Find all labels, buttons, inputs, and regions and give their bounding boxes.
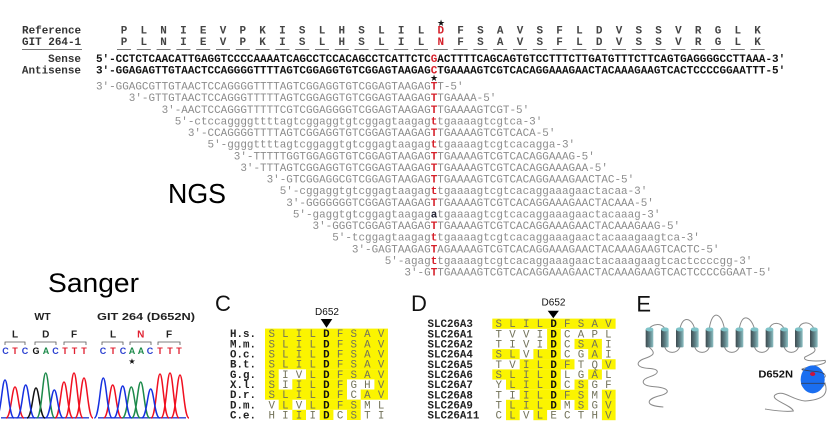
species labels: H.s.: [230, 329, 256, 341]
panel: NGS reads: 3'-AACTCCAGGGTTTTTCGTCGGAGGGGTCGGAGTAAGAG: [162, 105, 431, 117]
panel: NGS reads: 3'-GTTGTAACTCCAGGGTTTTTAGTCGGAGGTGTCGGAGTAAGAG: [129, 93, 431, 105]
row labels: Reference and GIT 264-1: Reference: [22, 26, 82, 38]
panel: NGS reads: TTGAAAA-5': [431, 93, 496, 105]
row labels: Reference and GIT 264-1: GIT 264-1: [22, 37, 82, 49]
heading: WT: WT: [34, 311, 51, 323]
heading: C: C: [215, 291, 231, 316]
reference amino acid sequence: PLNIEVPKISLHSLIL D FSAVSFLDVSSVRGLK: [121, 26, 761, 38]
panel: NGS reads: 3'-TTTTTGGTGGAGGTGTCGGAGTAAGAG: [234, 151, 431, 163]
residue letters: TIVI D CSAI: [496, 340, 612, 352]
base calls: G: [32, 346, 40, 356]
panel: NGS reads: 5'-gaggtgtcggagtaagag: [293, 209, 431, 221]
paralog labels: SLC26A7: [428, 380, 473, 392]
codon labels: N: [137, 330, 144, 340]
panel: NGS reads: 5'-cggaggtgtcggagtaagag: [280, 186, 431, 198]
heading: E: E: [636, 292, 651, 317]
panel: NGS reads: 3'-GGAGCGTTGTAACTCCAGGGGTTTTAGTCGGAGGTGTCGGAGTAAGAG: [96, 82, 431, 94]
residue letters: TVVI D CAPL: [496, 329, 612, 341]
base calls: T: [157, 346, 163, 356]
panel E: membrane topology diagram: [636, 292, 826, 411]
antisense strand: CTGAAAAGTCGTCACAGGAAAGAACTACAAAGAAGTCACTCCCCGGAATTT-5': [431, 66, 785, 78]
yellow conservation highlights: [265, 329, 388, 420]
panel: amino acid alignment header: [22, 18, 765, 50]
panel: NGS reads: 5'-tcggagtaagag: [332, 233, 431, 245]
label: D652: D652: [315, 307, 339, 318]
base calls: T: [110, 346, 116, 356]
icon: down arrow at D652: [321, 319, 332, 328]
base calls: C: [100, 346, 107, 356]
codon labels: D: [42, 330, 49, 340]
label: D652: D652: [542, 298, 566, 309]
base calls: C: [2, 346, 9, 356]
paralog labels: SLC26A9: [428, 400, 473, 412]
residue letters: SLIL D FSAV: [268, 350, 385, 362]
sense strand: [48, 54, 785, 66]
peak traces: [94, 373, 189, 418]
paralog labels: SLC26A8: [428, 390, 473, 402]
panel: NGS reads: TTGAAAAGTCGTCACAGGAAAGAACTAC-5': [431, 174, 634, 186]
cytoplasmic C-terminal tail: [765, 347, 826, 411]
paralog labels: SLC26A4: [428, 350, 473, 362]
base calls: C: [147, 346, 154, 356]
label: D652N: D652N: [758, 370, 793, 381]
panel: NGS reads: TTGAAAAGTCGTCACAGGAAAGAACTACAAA-5': [431, 198, 654, 210]
species labels: B.t.: [230, 360, 256, 372]
panel: NGS reads: 3'-GGGTCGGAGTAAGAG: [313, 221, 431, 233]
panel: NGS reads: 5'-ctccaggggttttagtcggaggtgtcggagtaagag: [175, 116, 431, 128]
heading: D: D: [411, 291, 427, 316]
residue letters: SLVL D CGAI: [496, 350, 612, 362]
base calls: [100, 346, 182, 356]
icon: star over NGS reads: ★: [430, 73, 438, 83]
base calls: T: [62, 346, 68, 356]
sense strand: Sense: [48, 54, 81, 66]
residue letters: SLIL D FCAV: [268, 390, 385, 402]
codon labels: F: [71, 330, 77, 340]
paralog labels: SLC26A11: [428, 411, 480, 423]
paralog labels: SLC26A6: [428, 370, 473, 382]
species labels: O.c.: [230, 350, 256, 362]
panel: WT chromatogram: [0, 311, 93, 418]
heading: NGS: NGS: [168, 178, 226, 209]
residue letters: SLIL D FSAV: [268, 360, 385, 372]
base calls: A: [129, 346, 136, 356]
panel: NGS reads: TTGAAAAGTCGTCACA-5': [431, 128, 555, 140]
species labels: [230, 329, 256, 422]
base calls: T: [176, 346, 182, 356]
panel C: species conservation alignment: [215, 291, 388, 422]
residue letters: TIIL D FSMV: [496, 390, 612, 402]
panel D: SLC26 paralog alignment: [411, 291, 616, 423]
base calls: C: [22, 346, 29, 356]
yellow conservation highlights: [492, 319, 616, 420]
panel: NGS reads: 3'-TTTAGTCGGAGGTGTCGGAGTAAGAG: [240, 163, 431, 175]
base calls: T: [167, 346, 173, 356]
base calls: [2, 346, 87, 356]
panel: NGS reads: TTGAAAAGTCGT-5': [431, 105, 529, 117]
panel: GIT 264 chromatogram: [94, 311, 195, 418]
protein backbone loops: [649, 315, 814, 328]
base calls: A: [138, 346, 145, 356]
codon labels: L: [12, 330, 18, 340]
panel: NGS reads: ttgaaaagtcgtcacaggaaagaactacaaagaagtca-3': [431, 233, 700, 245]
residue letters: HIII D CSTI: [268, 410, 384, 422]
base calls: T: [12, 346, 18, 356]
panel: sense and antisense strands: [22, 54, 785, 83]
base calls: A: [43, 346, 50, 356]
species labels: X.l.: [230, 380, 256, 392]
residue letters: CLVLECTHV: [496, 411, 612, 423]
panel: NGS reads: atgaaaagtcgtcacaggaaagaactacaaag-3': [431, 209, 660, 221]
panel: NGS reads: ttgaaaagtcgtca-3': [431, 116, 542, 128]
sense strand: 5'-CCTCTCAACATTGAGGTCCCCAAAATCAGCCTCCACAGCCTCATTCTC: [96, 54, 431, 66]
residue letters: SLIL D FSAV: [496, 319, 612, 331]
codon labels: L: [110, 330, 116, 340]
base calls: T: [81, 346, 87, 356]
base calls: C: [120, 346, 127, 356]
panel: NGS reads: 3'-GGGGGGGTCGGAGTAAGAG: [286, 198, 431, 210]
transmembrane helices: [646, 327, 818, 347]
paralog labels: SLC26A5: [428, 360, 473, 372]
panel: NGS reads: 5'-ggggttttagtcggaggtgtcggagtaagag: [208, 140, 431, 152]
sense strand: GACTTTTCAGCAGTGTCCTTTCTTGATGTTTCTTCAGTGAGGGGCCTTAAA-3': [431, 54, 785, 66]
panel: NGS reads: TTGAAAAGTCGTCACAGGAAAG-5': [431, 151, 595, 163]
panel: NGS reads: TTGAAAAGTCGTCACAGGAAAGAA-5': [431, 163, 608, 175]
heading: Sanger: Sanger: [48, 268, 139, 298]
heading: GIT 264 (D652N): GIT 264 (D652N): [97, 311, 195, 323]
residue letters: SIVL D FSAV: [268, 370, 385, 382]
panel: NGS reads: TTGAAAAGTCGTCACAGGAAAGAACTACAAAGAAG-5': [431, 221, 680, 233]
paralog labels: SLC26A1: [428, 329, 473, 341]
panel: NGS reads: 3'-G: [404, 268, 431, 280]
residue letters: [496, 319, 612, 423]
paralog labels: SLC26A3: [428, 319, 473, 331]
antisense strand: 3'-GGAGAGTTGTAACTCCAGGGGTTTTAGTCGGAGGTGTCGGAGTAAGAG: [96, 66, 431, 78]
residue letters: SLIL D LGAL: [496, 370, 612, 382]
residue letters: YLIL D CSGF: [496, 380, 612, 392]
panel: NGS reads: TT-5': [431, 82, 464, 94]
species labels: G.g.: [230, 370, 256, 382]
residue letters: SLIL D FSAV: [268, 329, 385, 341]
base calls: C: [52, 346, 59, 356]
GIT 264-1 amino acid sequence: PLNIEVPKISLHSLIL N FSAVSFLDVSSVRGLK: [121, 37, 761, 49]
icon: down arrow at D652: [548, 311, 559, 318]
paralog labels: SLC26A2: [428, 340, 473, 352]
residue letters: [268, 329, 385, 422]
species labels: C.e.: [230, 410, 256, 422]
panel: NGS reads: ttgaaaagtcgtcacaggaaagaactacaa-3': [431, 186, 647, 198]
panel: NGS reads: 3'-CCAGGGGTTTTAGTCGGAGGTGTCGGAGTAAGAG: [188, 128, 431, 140]
codon labels: F: [166, 330, 172, 340]
species labels: D.r.: [230, 390, 256, 402]
species labels: M.m.: [230, 339, 256, 351]
STAS domain ball with mutation site: [801, 365, 825, 393]
row labels: Reference and GIT 264-1: [22, 26, 82, 49]
icon: star under mutated base: ★: [128, 357, 136, 366]
panel: NGS reads: TAGAAAAGTCGTCACAGGAAAGAACTACAAAGAAGTCACTC-5': [431, 244, 720, 256]
panel: NGS reads: ttgaaaagtcgtcacagga-3': [431, 140, 575, 152]
cytoplasmic N-terminal tail: [638, 347, 667, 407]
residue letters: SIIL D FGHV: [268, 380, 385, 392]
residue letters: TVIL D FTQV: [496, 360, 612, 372]
panel: NGS reads: 5'-agag: [385, 256, 431, 268]
panel: NGS reads: 3'-GTCGGAGGCGTCGGAGTAAGAG: [267, 174, 431, 186]
panel: NGS reads: ttgaaaagtcgtcacaggaaagaactacaaagaagtcactccccgg-3': [431, 256, 752, 268]
panel: NGS reads: TTGAAAAGTCGTCACAGGAAAGAACTACAAAGAAGTCACTCCCCGGAAT-5': [431, 268, 772, 280]
base calls: T: [72, 346, 78, 356]
peak traces: [0, 373, 93, 418]
residue letters: SLIL D FSAV: [268, 339, 385, 351]
residue letters: TLIL D MSGV: [496, 400, 612, 412]
residue letters: VLVL D FSML: [268, 400, 384, 412]
panel: NGS reads: [96, 82, 772, 280]
antisense strand: Antisense: [22, 66, 81, 78]
codon labels: [5, 330, 86, 345]
panel: NGS reads: 3'-GAGTAAGAG: [352, 244, 431, 256]
species labels: D.m.: [230, 400, 256, 412]
codon labels: [102, 330, 180, 345]
antisense strand: [22, 66, 785, 78]
icon: star over D652: ★: [437, 18, 445, 28]
paralog labels: [428, 319, 480, 423]
